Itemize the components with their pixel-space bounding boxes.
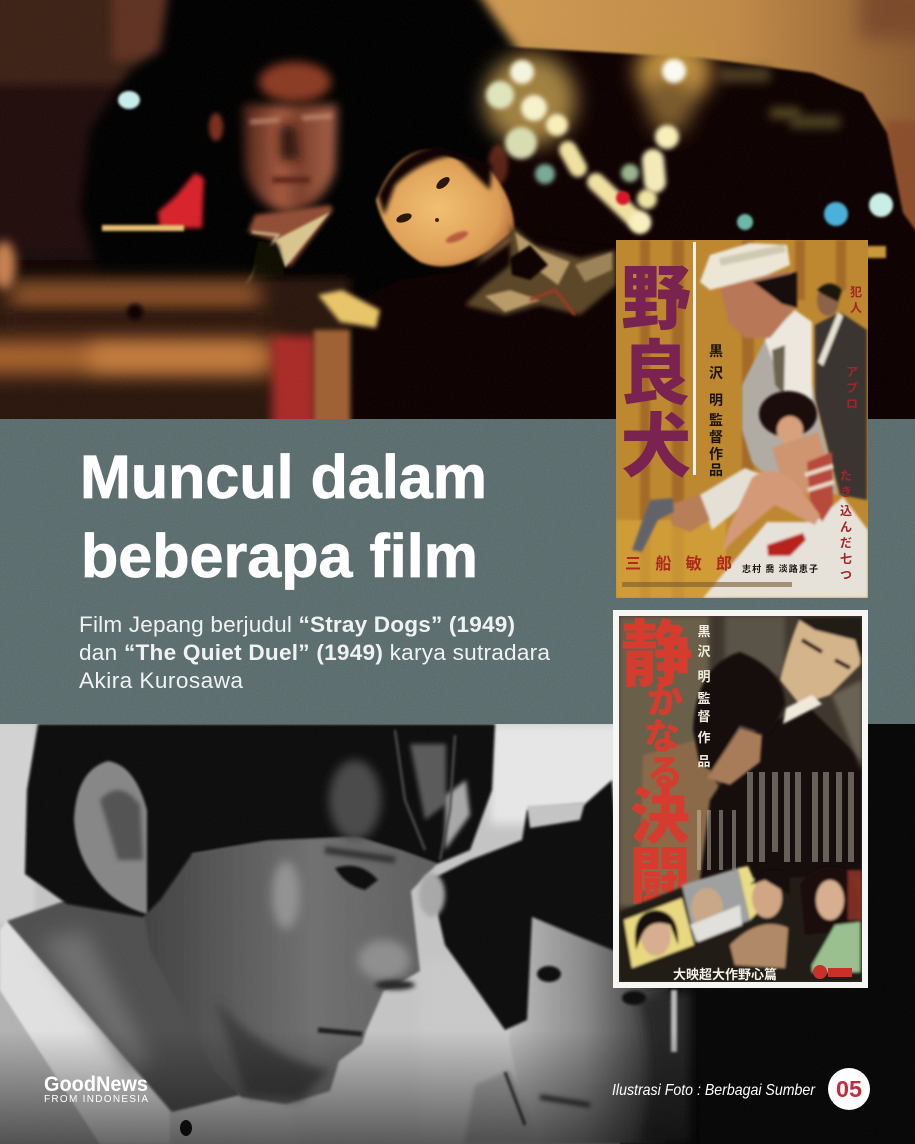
purple title kanji: 良 [620, 335, 690, 413]
eye, brow, mouth [335, 866, 378, 890]
woman with dark hair and hand [419, 780, 690, 1144]
hair mass silhouette [80, 0, 518, 300]
body text: Akira Kurosawa [79, 668, 243, 693]
poster: The Quiet Duel [613, 610, 868, 988]
poster: Stray Dogs [616, 240, 868, 598]
heading: beberapa film [81, 522, 478, 590]
bright white point [118, 91, 140, 109]
director credit: 黒 [709, 343, 723, 359]
purple title kanji: 犬 [621, 408, 691, 486]
side red text: ア [846, 365, 858, 379]
side red text: だ [840, 536, 852, 550]
body text: Film Jepang berjudul “Stray Dogs” (1949) [79, 612, 515, 637]
red title kanji: 決 [630, 784, 690, 851]
studio logo [813, 965, 852, 979]
side red text: プ [846, 381, 858, 395]
side red text: 七 [840, 552, 852, 566]
director credit: 品 [697, 754, 711, 769]
bottom slogan: 大映超大作野心篇 [673, 964, 777, 983]
side red text: き [840, 485, 852, 499]
heading [80, 443, 487, 590]
director credit: 監 [709, 412, 723, 428]
side red text: つ [840, 568, 852, 582]
bokeh street lights [486, 59, 893, 258]
red title kanji: な [644, 716, 680, 757]
tan coat [640, 740, 720, 900]
logo: GoodNews from Indonesia: GoodNews [44, 1073, 148, 1096]
side red text [840, 284, 862, 582]
director credit: 黒 [697, 624, 711, 639]
logo: GoodNews from Indonesia [44, 1073, 148, 1105]
purple title kanji [622, 266, 690, 478]
page number badge [828, 1068, 870, 1110]
heading: Muncul dalam [80, 443, 487, 511]
top photo: couple in car at night [0, 0, 915, 430]
red title kanji: 闘 [629, 843, 691, 912]
cast names [622, 555, 818, 587]
white line [693, 242, 696, 475]
man's arm holding pistol [632, 468, 770, 552]
red title kanji [621, 616, 693, 912]
director credit: 沢 [697, 644, 711, 659]
side red text: 犯 [850, 284, 862, 299]
director credit: 明 [709, 392, 723, 408]
man's face [209, 62, 337, 295]
director credit: 作 [709, 446, 723, 462]
director credit: 沢 [709, 365, 723, 381]
director credit [697, 624, 711, 769]
red glow behind man [158, 173, 204, 228]
cast names: 三船敏郎 [625, 550, 732, 574]
dashboard light strip [102, 225, 184, 231]
white coat and woman in swimsuit [703, 391, 868, 598]
director credit: 監 [697, 691, 711, 706]
middle man's hair and face [693, 652, 785, 785]
woman's face and hair [376, 145, 526, 276]
top-left brown wall [0, 83, 120, 263]
woman's patterned dress [375, 224, 616, 318]
dark suit [700, 708, 862, 880]
top man's face [780, 617, 862, 724]
side red text: 人 [850, 301, 862, 315]
director credit [709, 343, 723, 478]
second man in dark suit [815, 284, 867, 500]
yellow bokeh halos [484, 40, 712, 146]
rear window [487, 46, 915, 257]
side red text: ん [840, 520, 852, 534]
credit text blocks [697, 772, 854, 870]
director credit: 督 [697, 709, 711, 724]
bottom cast portraits [619, 866, 862, 982]
body text [79, 612, 550, 693]
ear [74, 761, 147, 914]
side red text: ロ [846, 397, 858, 411]
red title kanji: 静 [621, 616, 693, 696]
page number badge: 05 [836, 1076, 862, 1102]
man's head in profile [25, 724, 495, 1104]
photo credit: Ilustrasi Foto : Berbagai Sumber [612, 1082, 816, 1099]
teal title band [0, 419, 915, 724]
red title kanji: か [647, 680, 683, 721]
man's shirt and collar [0, 900, 240, 1144]
side red text: た [840, 469, 852, 483]
blurred car dashboard foreground [0, 241, 380, 430]
red title kanji: る [647, 752, 683, 793]
purple title kanji: 野 [621, 260, 691, 338]
side red text: 込 [840, 504, 852, 518]
cast names: 志村 喬 淡路恵子 [742, 562, 818, 575]
director credit: 督 [709, 429, 723, 445]
director credit: 明 [697, 669, 711, 684]
man in white cap and suit [700, 243, 838, 495]
director credit: 品 [709, 462, 723, 478]
director credit: 作 [697, 730, 711, 745]
hair [25, 724, 495, 917]
body text: dan “The Quiet Duel” (1949) karya sutradara [79, 640, 550, 665]
logo: GoodNews from Indonesia: FROM INDONESIA [44, 1094, 148, 1105]
bottom photo: black and white film still [0, 724, 915, 1144]
